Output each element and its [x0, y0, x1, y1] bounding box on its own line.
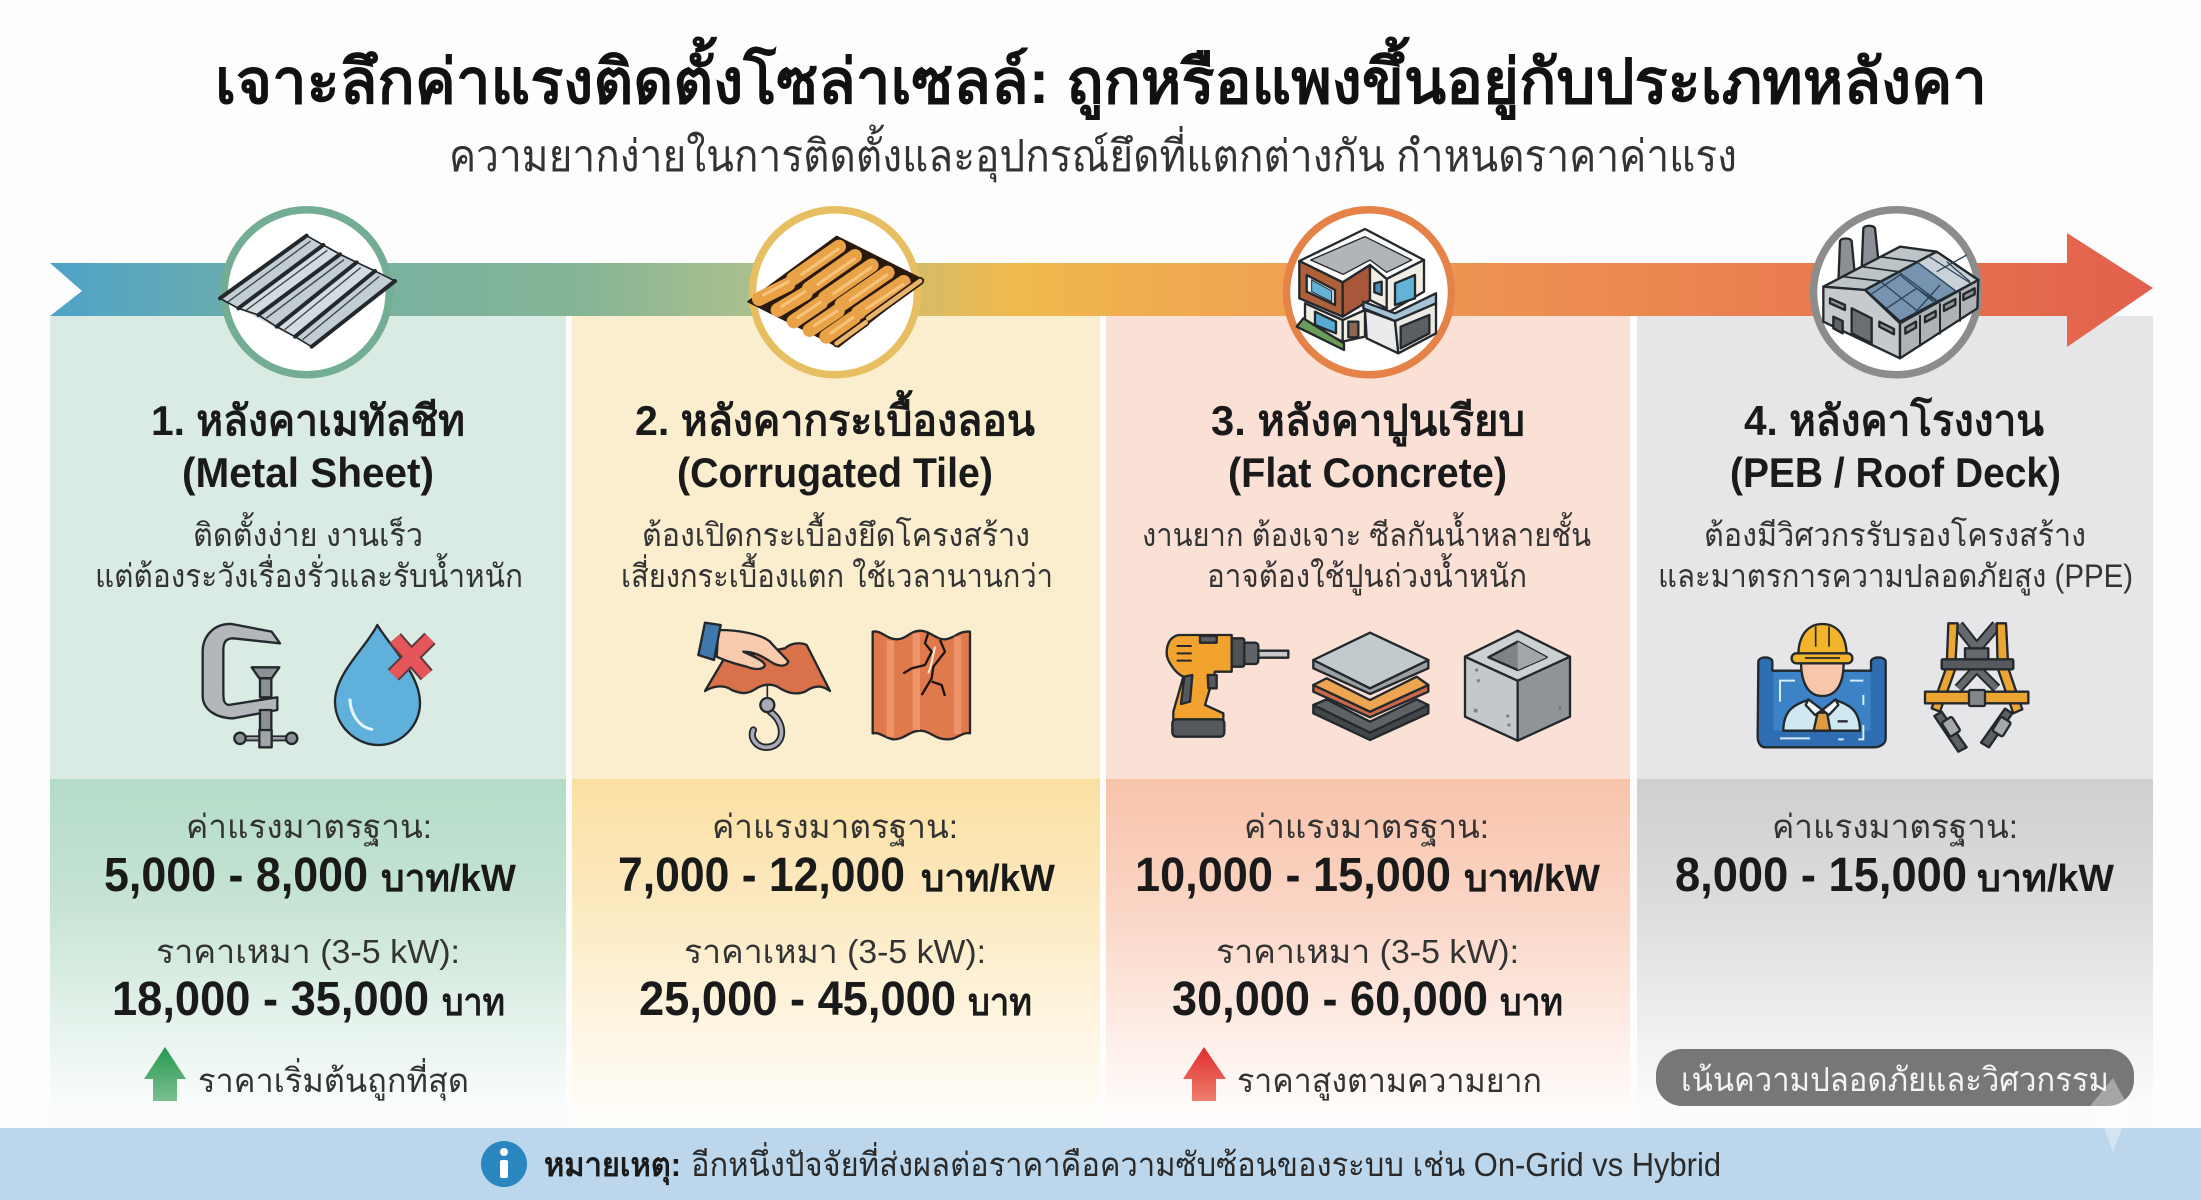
description: column 2: เสี่ยงกระเบื้องแตก ใช้เวลานานกว่า	[621, 553, 1053, 594]
price: column 1: 18,000 - 35,000	[112, 973, 429, 1026]
icon: flat concrete house	[1286, 210, 1452, 375]
heading: column 2	[635, 389, 1035, 496]
price: column 2	[618, 808, 1055, 1026]
footer text: อีกหนึ่งปัจจัยที่ส่งผลต่อราคาคือความซับซ้อนของระบบ เช่น On-Grid vs Hybrid	[691, 1142, 1721, 1183]
icon: c-clamp	[203, 624, 297, 747]
heading: column 1	[151, 397, 465, 496]
price: column 2: 7,000 - 12,000	[618, 849, 905, 902]
heading: column 3: 3. หลังคาปูนเรียบ	[1211, 397, 1525, 447]
price: column 1: บาท/kW	[381, 858, 516, 900]
progress arrow band	[50, 233, 2153, 347]
badge: safety and engineering: เน้นความปลอดภัยและวิศวกรรม	[1681, 1061, 2109, 1098]
icon: factory building	[1814, 210, 1978, 375]
subtitle: ความยากง่ายในการติดตั้งและอุปกรณ์ยึดที่แตกต่างกัน กำหนดราคาค่าแรง	[449, 124, 1737, 183]
footer text: หมายเหตุ:	[544, 1146, 681, 1186]
description: column 2	[621, 512, 1053, 594]
description: column 2: ต้องเปิดกระเบื้องยึดโครงสร้าง	[642, 512, 1030, 553]
price: column 2: ค่าแรงมาตรฐาน:	[712, 808, 958, 847]
price: column 1: ค่าแรงมาตรฐาน:	[186, 808, 432, 847]
price: column 3: ราคาเหมา (3-5 kW):	[1216, 933, 1519, 970]
price: column 3: 30,000 - 60,000	[1172, 973, 1488, 1026]
heading: column 2: 2. หลังคากระเบื้องลอน	[635, 389, 1035, 444]
price: column 3	[1135, 808, 1600, 1026]
heading: column 2: (Corrugated Tile)	[677, 449, 993, 496]
icon: concrete block	[1465, 631, 1570, 741]
description: column 4	[1658, 517, 2133, 596]
panel: factory roof	[1637, 316, 2153, 1128]
description: column 3: อาจต้องใช้ปูนถ่วงน้ำหนัก	[1207, 553, 1527, 596]
price: column 1: ราคาเหมา (3-5 kW):	[156, 933, 460, 970]
icon: info	[481, 1141, 527, 1187]
price: column 3: ค่าแรงมาตรฐาน:	[1244, 808, 1489, 847]
heading: column 1: 1. หลังคาเมทัลชีท	[151, 397, 465, 444]
price: column 2: 25,000 - 45,000	[639, 973, 956, 1026]
badge: safety and engineering	[1656, 1049, 2134, 1106]
icon: safety harness	[1925, 623, 2028, 752]
icon: waterproof layers	[1313, 633, 1428, 740]
arrow and note: lowest price	[144, 1047, 469, 1101]
description: column 1	[95, 512, 523, 594]
panel: flat concrete	[1106, 316, 1630, 1128]
heading: column 3	[1211, 397, 1525, 496]
heading: column 3: (Flat Concrete)	[1228, 449, 1507, 496]
price: column 1: 5,000 - 8,000	[104, 849, 368, 902]
description: column 3	[1142, 512, 1591, 596]
panel: corrugated tile	[572, 316, 1100, 1128]
arrow and note: higher price: ราคาสูงตามความยาก	[1237, 1062, 1542, 1101]
arrow and note: lowest price: ราคาเริ่มต้นถูกที่สุด	[198, 1058, 469, 1101]
heading: column 4: (PEB / Roof Deck)	[1730, 449, 2061, 496]
price: column 2: บาท	[968, 982, 1032, 1024]
title: เจาะลึกค่าแรงติดตั้งโซล่าเซลล์: ถูกหรือแพงขึ้นอยู่กับประเภทหลังคา	[215, 36, 1987, 120]
price: column 3: บาท/kW	[1464, 858, 1600, 900]
panel: metal sheet	[50, 316, 566, 1128]
icon: engineer with blueprint	[1758, 624, 1886, 747]
description: column 3: งานยาก ต้องเจาะ ซีลกันน้ำหลายชั้น	[1142, 512, 1591, 553]
price: column 4: 8,000 - 15,000	[1675, 849, 1967, 902]
price: column 2: บาท/kW	[921, 858, 1055, 900]
description: column 1: แต่ต้องระวังเรื่องรั่วและรับน้ำหนัก	[95, 553, 523, 594]
description: column 4: และมาตรการความปลอดภัยสูง (PPE)	[1658, 558, 2133, 596]
icon: corrugated tile roof	[748, 210, 923, 375]
icon: power drill	[1167, 635, 1288, 737]
icon: water drop with cross	[335, 625, 430, 745]
description: column 1: ติดตั้งง่าย งานเร็ว	[193, 512, 423, 553]
price: column 2: ราคาเหมา (3-5 kW):	[684, 933, 986, 970]
icon: metal sheet roof	[220, 210, 395, 375]
heading: column 4	[1730, 396, 2061, 496]
price: column 4: บาท/kW	[1977, 858, 2114, 900]
price: column 1: บาท	[442, 982, 505, 1024]
icon: hand lifting tile with hook	[698, 623, 830, 747]
arrow and note: higher price	[1183, 1047, 1542, 1101]
description: column 4: ต้องมีวิศวกรรับรองโครงสร้าง	[1704, 517, 2086, 553]
price: column 4: ค่าแรงมาตรฐาน:	[1772, 808, 2018, 847]
sparkle watermark	[2090, 1078, 2131, 1152]
price: column 1	[104, 808, 516, 1026]
price: column 4	[1675, 808, 2114, 902]
price: column 3: บาท	[1500, 982, 1563, 1024]
heading: column 1: (Metal Sheet)	[182, 449, 434, 496]
heading: column 4: 4. หลังคาโรงงาน	[1744, 396, 2044, 444]
price: column 3: 10,000 - 15,000	[1135, 849, 1451, 902]
icon: cracked tile	[873, 631, 970, 739]
footer note bar	[0, 1128, 2201, 1200]
